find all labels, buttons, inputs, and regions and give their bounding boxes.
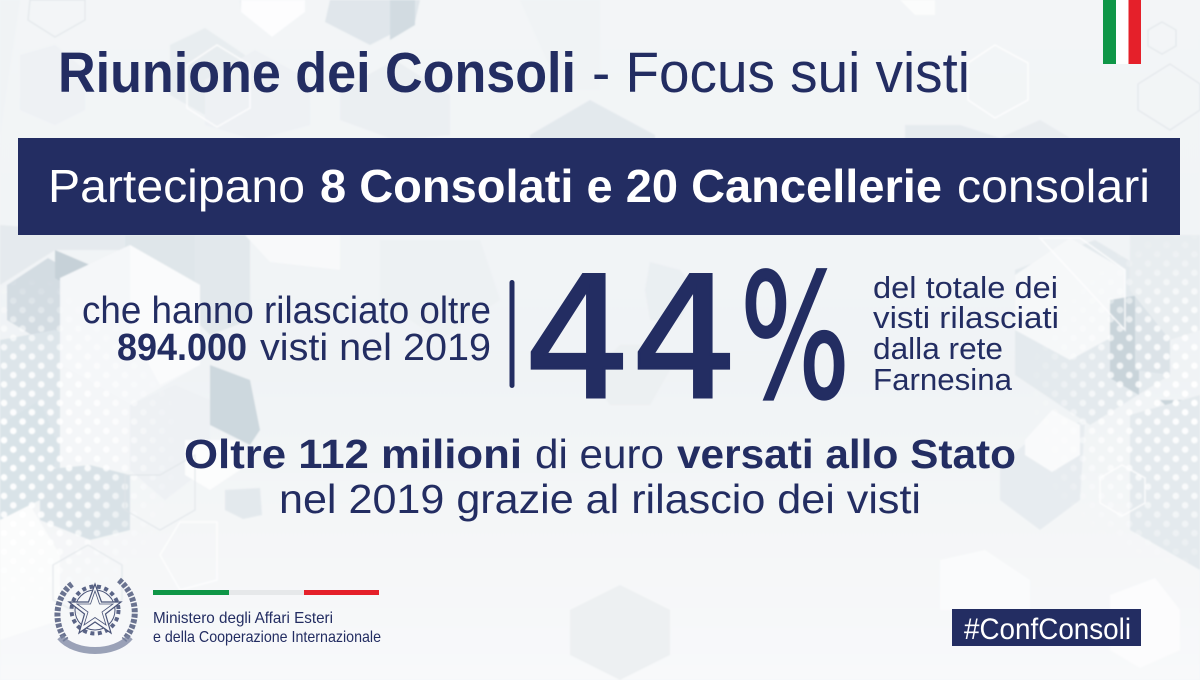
big number 44%	[524, 237, 850, 438]
icon: emblem of the Italian Republic	[57, 580, 135, 650]
text: revenue: versati allo Stato	[677, 431, 1016, 477]
italian flag	[1103, 0, 1141, 64]
text: share of total: visti rilasciati	[873, 300, 1059, 335]
tricolour bar	[153, 590, 379, 595]
banner: Partecipano	[48, 160, 305, 212]
ministry name: Ministero degli Affari Esteri	[153, 610, 333, 627]
text: revenue	[184, 431, 1016, 522]
text: visas issued: che hanno rilasciato oltre	[82, 290, 491, 332]
title: Riunione dei Consoli	[58, 41, 576, 105]
text: visas issued	[82, 290, 491, 369]
banner	[18, 138, 1180, 235]
big number 44%: 44	[524, 241, 738, 437]
banner: consolari	[957, 160, 1150, 212]
ministry name	[153, 610, 381, 646]
divider	[510, 280, 514, 388]
banner: 8 Consolati e 20 Cancellerie	[320, 160, 942, 212]
text: visas issued: visti nel 2019	[260, 327, 491, 369]
text: revenue: Oltre 112 milioni	[184, 431, 522, 477]
hashtag: #ConfConsoli	[964, 613, 1131, 646]
text: share of total: Farnesina	[873, 362, 1013, 397]
text: share of total: del totale dei	[873, 270, 1058, 305]
text: visas issued: 894.000	[117, 327, 247, 369]
text: revenue: nel 2019 grazie al rilascio dei visti	[279, 476, 921, 522]
text: share of total: dalla rete	[873, 331, 1003, 366]
title: - Focus sui visti	[592, 41, 970, 105]
text: revenue: di euro	[535, 431, 664, 477]
ministry name: e della Cooperazione Internazionale	[153, 629, 381, 646]
title	[58, 41, 970, 105]
text: share of total	[873, 270, 1059, 397]
big number 44%: %	[740, 237, 850, 438]
